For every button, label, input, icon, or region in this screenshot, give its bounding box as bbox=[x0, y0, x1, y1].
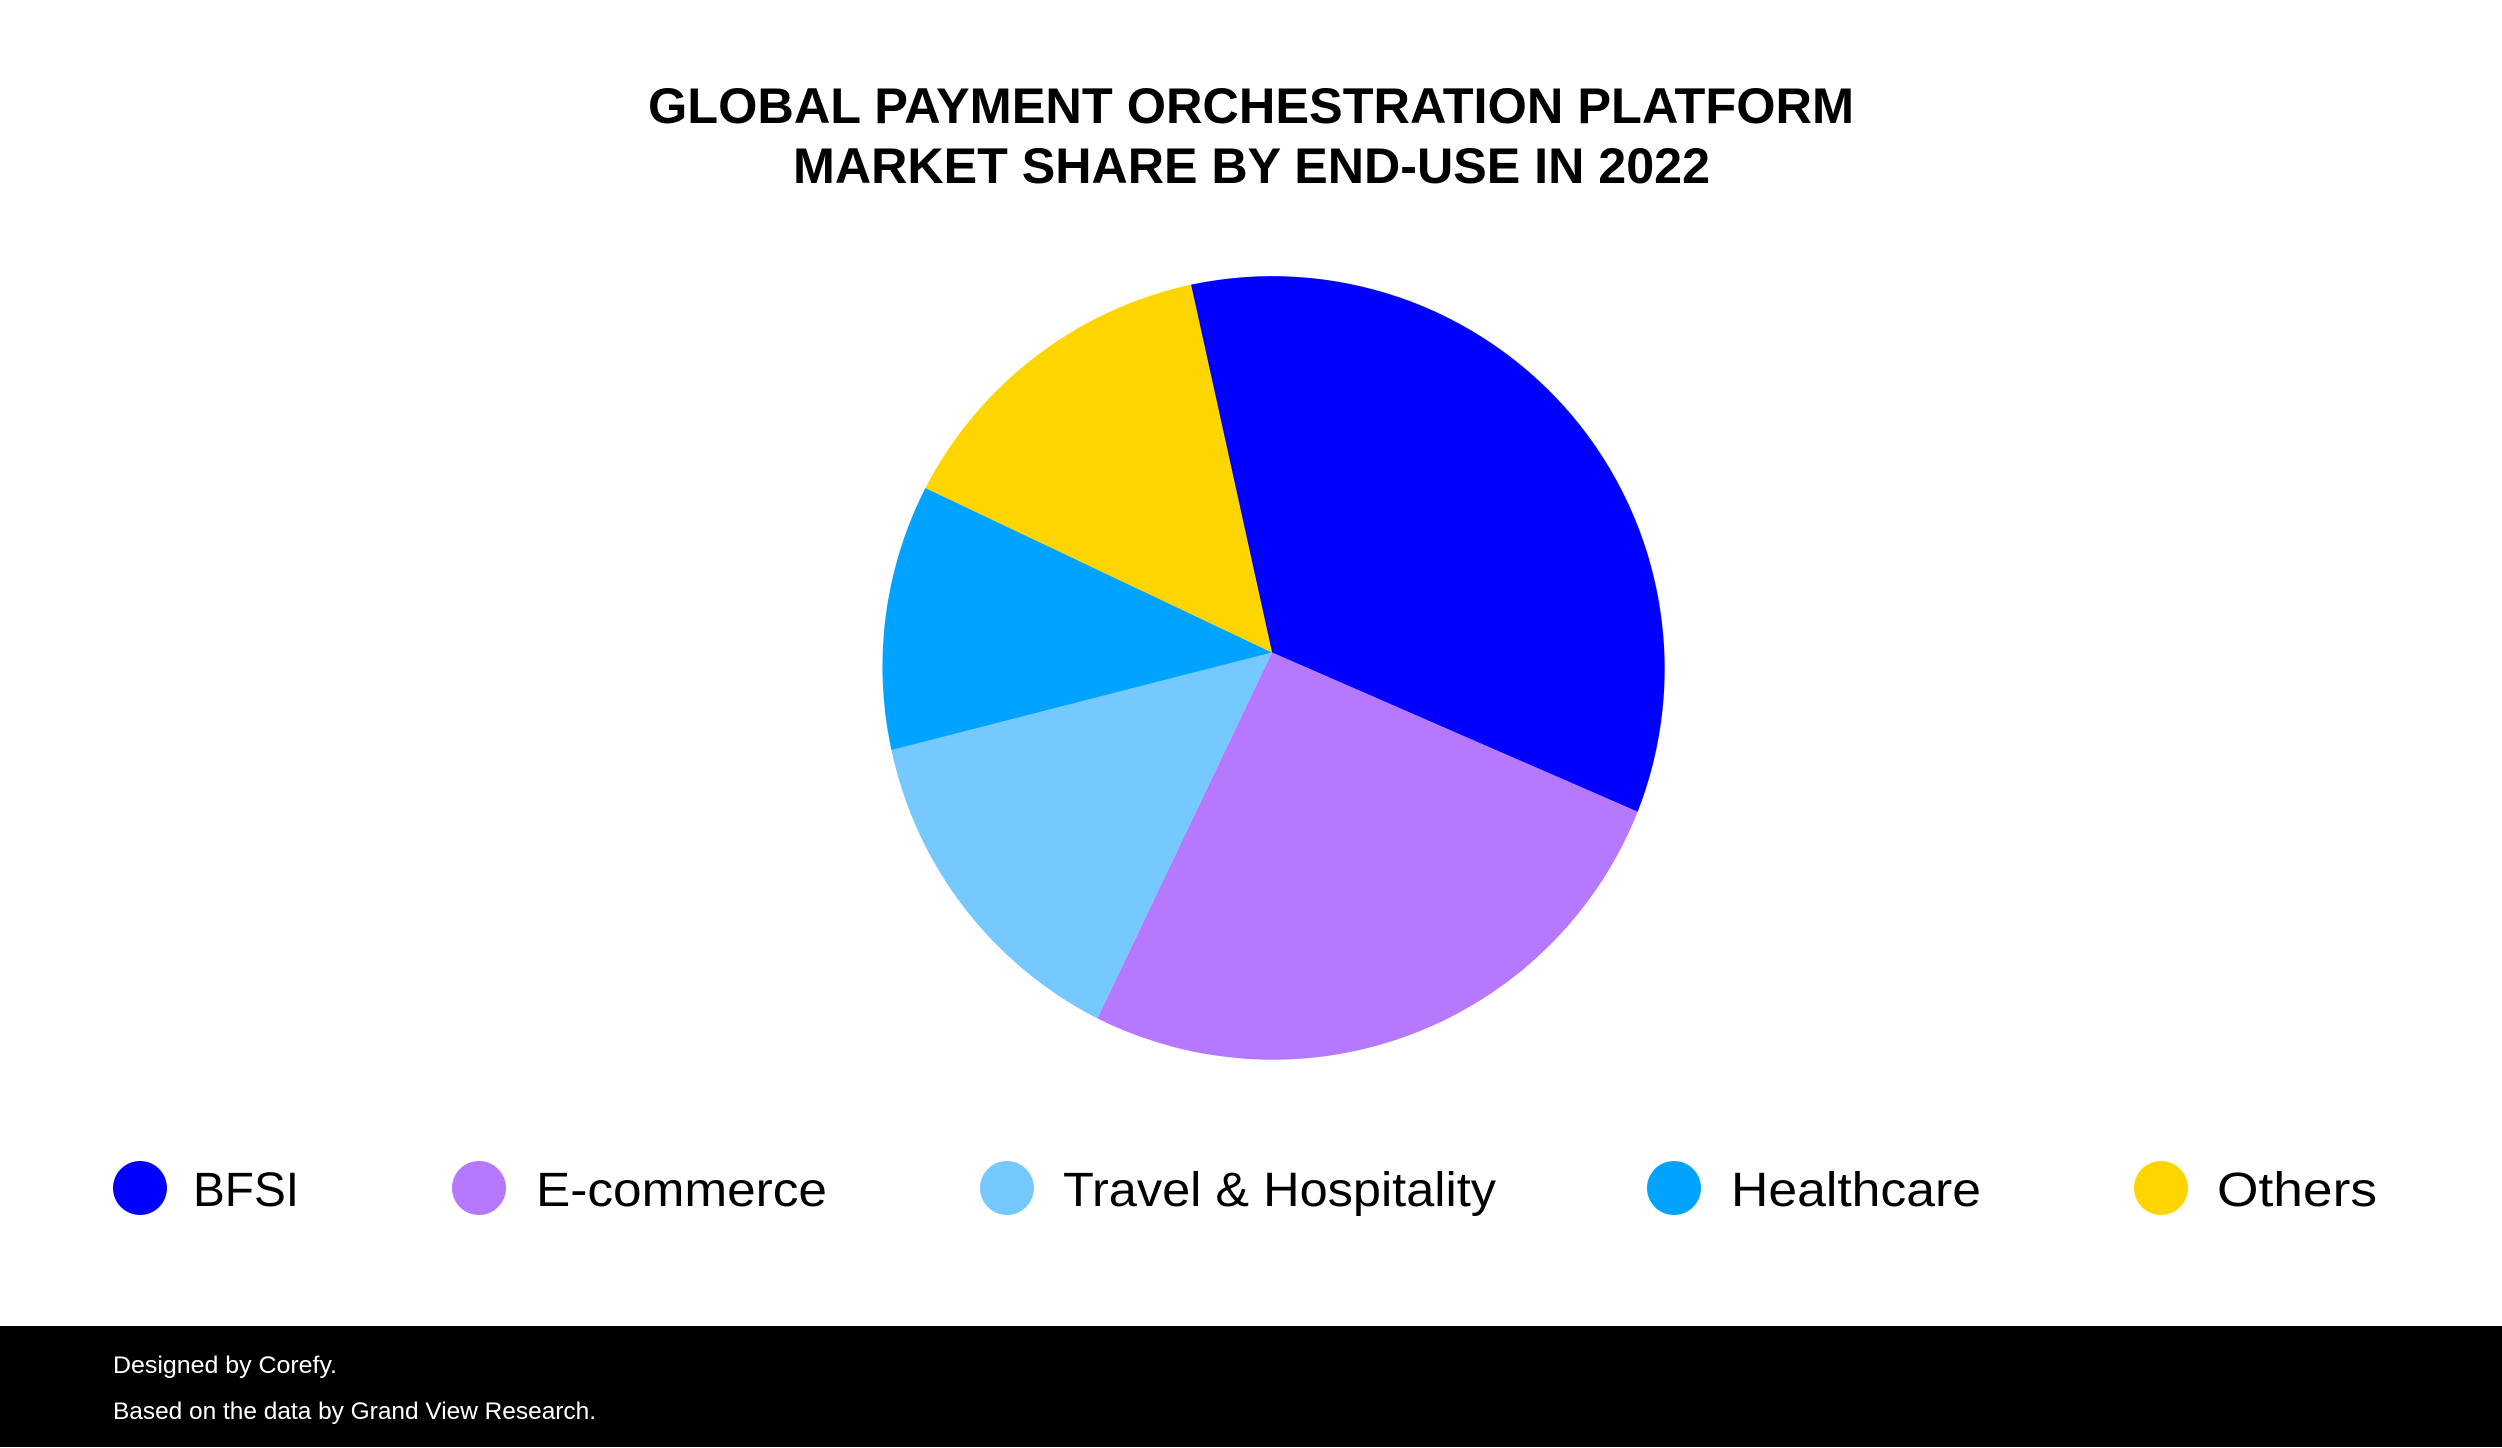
footer credit: data source: Based on the data by Grand View Research. bbox=[113, 1398, 596, 1425]
legend item: Others bbox=[2134, 1161, 2377, 1217]
legend item: BFSI bbox=[113, 1161, 299, 1217]
legend item: E-commerce: E-commerce bbox=[536, 1164, 827, 1217]
title: GLOBAL PAYMENT ORCHESTRATION PLATFORM bbox=[648, 78, 1854, 134]
pie chart bbox=[882, 276, 1665, 1060]
slice: E-commerce bbox=[1097, 652, 1638, 1060]
legend bbox=[113, 1161, 2377, 1217]
slice: Travel & Hospitality bbox=[891, 652, 1272, 1018]
legend item: Healthcare bbox=[1647, 1161, 1981, 1217]
footer credit: designer: Designed by Corefy. bbox=[113, 1352, 337, 1379]
legend item: E-commerce bbox=[452, 1161, 827, 1217]
slice: Healthcare bbox=[882, 488, 1272, 750]
legend item: Others: Others bbox=[2217, 1164, 2377, 1217]
footer bar bbox=[0, 1326, 2502, 1447]
legend item: BFSI: BFSI bbox=[193, 1164, 299, 1217]
title bbox=[648, 78, 1854, 194]
slice: BFSI bbox=[1191, 276, 1665, 812]
slice: Others bbox=[925, 285, 1272, 652]
legend item: Travel & Hospitality: Travel & Hospitality bbox=[1063, 1164, 1496, 1217]
legend item: Healthcare: Healthcare bbox=[1731, 1164, 1981, 1217]
title: MARKET SHARE BY END-USE IN 2022 bbox=[793, 138, 1710, 194]
